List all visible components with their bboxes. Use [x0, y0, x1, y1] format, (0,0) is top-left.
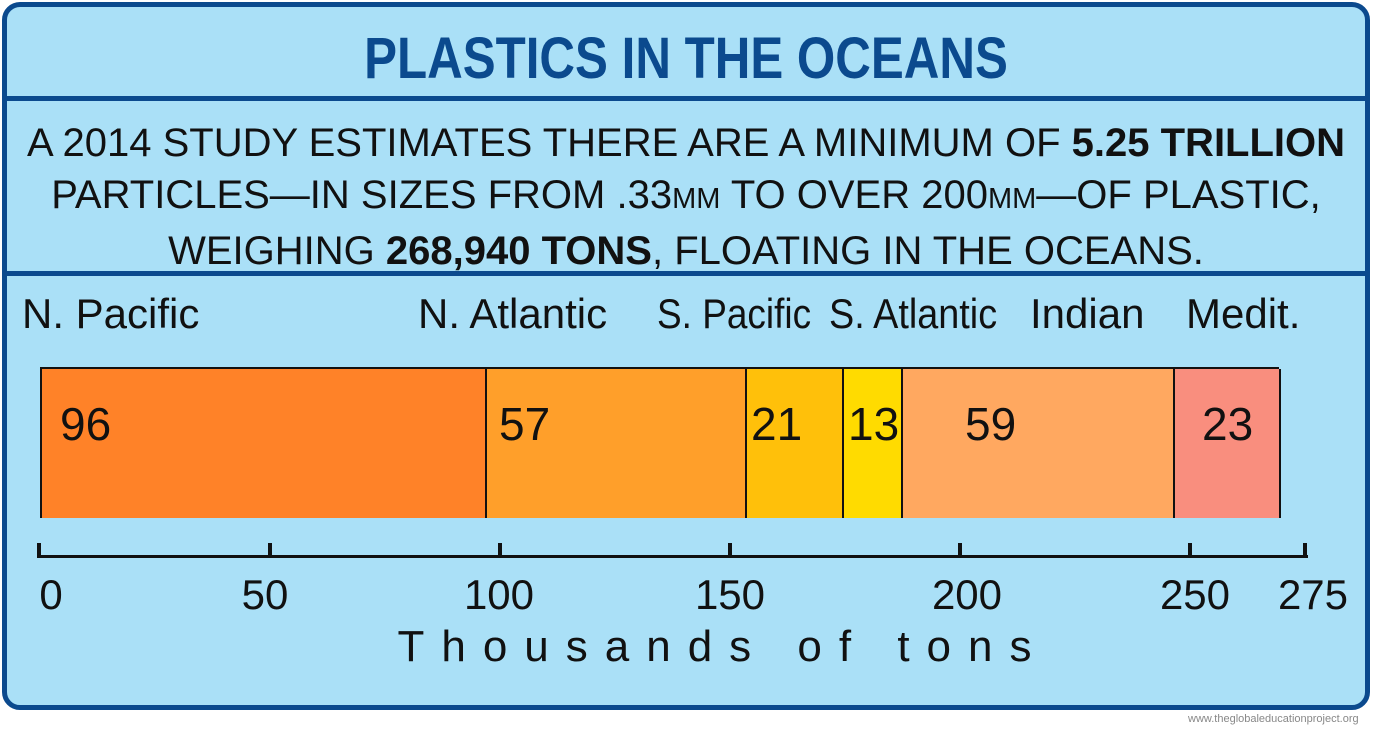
- axis: 250: [1160, 571, 1230, 618]
- segment: S. Pacific 21: 21: [751, 398, 802, 450]
- segment: Medit 23: 23: [1202, 398, 1253, 450]
- segment: S. Atlantic 13: [844, 369, 903, 518]
- axis: 200: [932, 571, 1002, 618]
- segment: S. Pacific 21: [747, 369, 844, 518]
- segment: Indian 59: 59: [965, 398, 1016, 450]
- text: N. Pacific: [22, 290, 199, 337]
- axis: 100: [464, 571, 534, 618]
- segment: N. Pacific 96: [42, 369, 487, 518]
- subtitle text: PARTICLES—IN SIZES FROM .33MM TO OVER 200MM—OF PLASTIC,: [51, 173, 1321, 217]
- credit: www.theglobaleducationproject.org: [1188, 713, 1359, 725]
- text: Medit.: [1186, 290, 1300, 337]
- text: N. Atlantic: [418, 290, 607, 337]
- axis: 50: [242, 571, 288, 618]
- subtitle text: [27, 121, 1345, 273]
- segment: S. Atlantic 13: 13: [848, 398, 899, 450]
- axis: [37, 543, 1348, 618]
- axis: 0: [39, 571, 63, 618]
- segment: Medit 23: [1175, 369, 1281, 518]
- subtitle text: WEIGHING 268,940 TONS, FLOATING IN THE OCEANS.: [168, 229, 1204, 273]
- text: Indian: [1030, 290, 1144, 337]
- segment: Indian 59: [903, 369, 1175, 518]
- title: PLASTICS IN THE OCEANS: [364, 26, 1008, 91]
- axis title: Thousands of tons: [397, 622, 1048, 671]
- axis: 150: [695, 571, 765, 618]
- segment: N. Atlantic 57: 57: [499, 398, 550, 450]
- ocean labels: [22, 290, 1300, 337]
- subtitle text: A 2014 STUDY ESTIMATES THERE ARE A MINIMUM OF 5.25 TRILLION: [27, 121, 1345, 165]
- segment: N. Atlantic 57: [487, 369, 747, 518]
- stacked bar chart: [40, 367, 1279, 518]
- text: S. Atlantic: [829, 290, 997, 337]
- text: S. Pacific: [657, 290, 811, 337]
- axis: 275: [1278, 571, 1348, 618]
- segment: N. Pacific 96: 96: [60, 398, 111, 450]
